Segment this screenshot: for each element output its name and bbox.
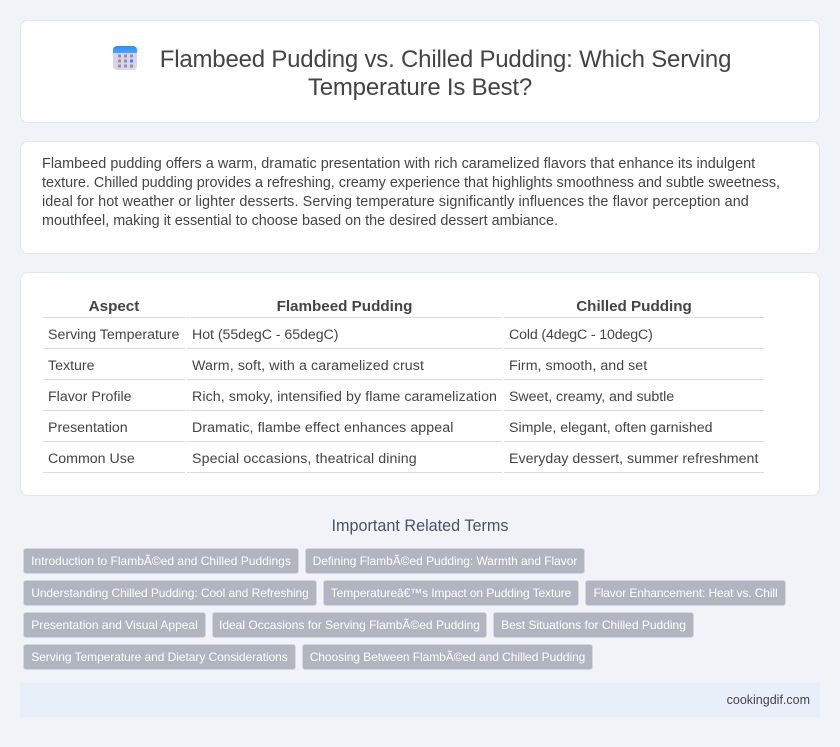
comparison table panel bbox=[20, 272, 820, 496]
title panel bbox=[20, 20, 820, 123]
heading bbox=[160, 46, 731, 101]
summary text: mouthfeel, making it essential to choose based on the desired dessert ambiance. bbox=[42, 213, 558, 229]
comparison table: Hot (55degC - 65degC) bbox=[192, 327, 338, 343]
footer bar bbox=[20, 683, 820, 717]
summary text bbox=[42, 156, 780, 229]
summary text: Flambeed pudding offers a warm, dramatic presentation with rich caramelized flavors that enhance its indulgent bbox=[42, 156, 755, 172]
related terms tags: Serving Temperature and Dietary Considerations bbox=[31, 650, 288, 664]
related terms tags: Understanding Chilled Pudding: Cool and Refreshing bbox=[31, 586, 309, 600]
heading: Flambeed Pudding vs. Chilled Pudding: Which Serving bbox=[160, 46, 731, 73]
heading: Temperature Is Best? bbox=[308, 74, 532, 101]
related terms tags: Temperatureâ€™s Impact on Pudding Texture bbox=[331, 586, 571, 600]
related terms tags: Best Situations for Chilled Pudding bbox=[501, 618, 686, 632]
related terms tags bbox=[23, 548, 786, 670]
comparison table: Aspect bbox=[89, 298, 139, 315]
related terms tags: Choosing Between FlambÃ©ed and Chilled Pudding bbox=[310, 650, 585, 664]
comparison table: Simple, elegant, often garnished bbox=[509, 420, 712, 436]
comparison table: Firm, smooth, and set bbox=[509, 358, 647, 374]
comparison table: Flavor Profile bbox=[48, 389, 132, 405]
summary panel bbox=[20, 141, 820, 254]
comparison table bbox=[43, 298, 764, 473]
comparison table: Warm, soft, with a caramelized crust bbox=[192, 358, 424, 374]
related terms tags: Introduction to FlambÃ©ed and Chilled Puddings bbox=[31, 554, 291, 568]
comparison table: Presentation bbox=[48, 420, 128, 436]
comparison table: Everyday dessert, summer refreshment bbox=[509, 451, 758, 467]
comparison table: Rich, smoky, intensified by flame caramelization bbox=[192, 389, 497, 405]
related terms tags: Presentation and Visual Appeal bbox=[31, 618, 198, 632]
summary text: texture. Chilled pudding provides a refreshing, creamy experience that highlights smoothness and subtle sweetness, bbox=[42, 175, 780, 191]
summary text: ideal for hot weather or lighter desserts. Serving temperature significantly influences the flavor perception and bbox=[42, 194, 749, 210]
comparison table: Cold (4degC - 10degC) bbox=[509, 327, 653, 343]
comparison table: Dramatic, flambe effect enhances appeal bbox=[192, 420, 454, 436]
comparison table: Texture bbox=[48, 358, 95, 374]
comparison table: Sweet, creamy, and subtle bbox=[509, 389, 674, 405]
icon: calendar bbox=[113, 46, 137, 70]
related terms tags: Ideal Occasions for Serving FlambÃ©ed Pudding bbox=[219, 618, 480, 632]
related terms heading: Important Related Terms bbox=[332, 517, 508, 535]
comparison table: Common Use bbox=[48, 451, 135, 467]
comparison table: Serving Temperature bbox=[48, 327, 179, 343]
comparison table: Flambeed Pudding bbox=[277, 298, 412, 315]
comparison table: Special occasions, theatrical dining bbox=[192, 451, 417, 467]
related terms tags: Flavor Enhancement: Heat vs. Chill bbox=[593, 586, 778, 600]
comparison table: Chilled Pudding bbox=[576, 298, 692, 315]
related terms tags: Defining FlambÃ©ed Pudding: Warmth and Flavor bbox=[313, 554, 577, 568]
footer source: cookingdif.com bbox=[727, 693, 810, 707]
